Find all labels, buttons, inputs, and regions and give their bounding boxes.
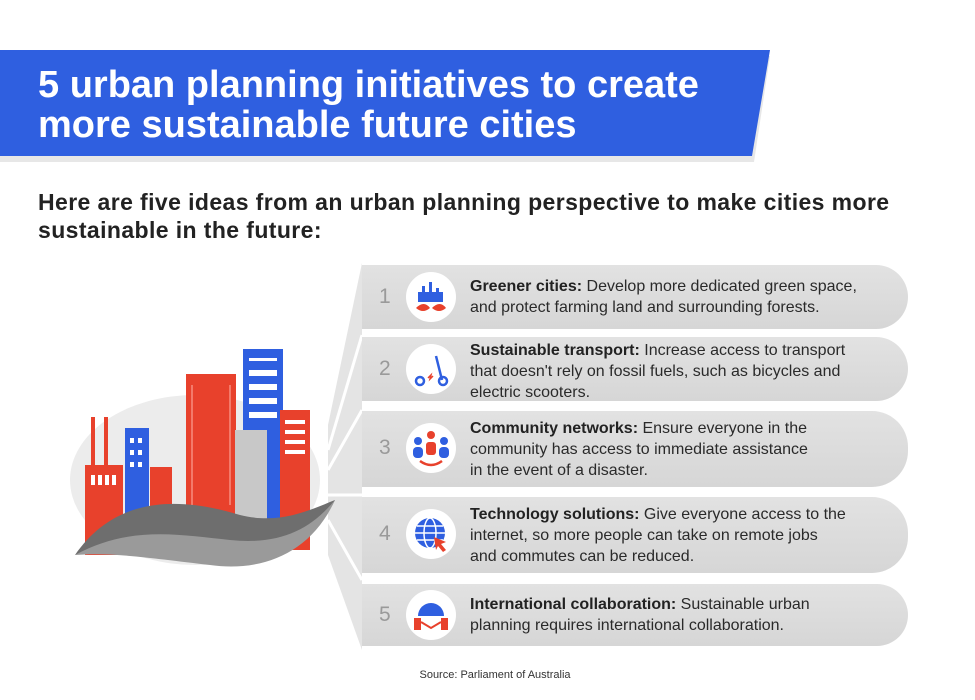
panel 2: electric scooters. xyxy=(470,384,590,401)
title text: more sustainable future cities xyxy=(38,104,576,146)
fan connectors xyxy=(328,264,362,650)
panel 5 xyxy=(362,584,908,646)
panel 4: Technology solutions: Give everyone access to the xyxy=(470,506,846,523)
panel 1: 1 xyxy=(379,285,391,308)
panel 3: Community networks: Ensure everyone in the xyxy=(470,420,807,437)
panel 5: International collaboration: Sustainable urban xyxy=(470,596,810,613)
panel 1 xyxy=(362,265,908,329)
title text: 5 urban planning initiatives to create xyxy=(38,64,699,106)
panel 4: and commutes can be reduced. xyxy=(470,548,694,565)
panel 2: that doesn't rely on fossil fuels, such as bicycles and xyxy=(470,363,840,380)
subtitle xyxy=(38,189,890,243)
panel 4 xyxy=(362,497,908,573)
panel 1: and protect farming land and surrounding forests. xyxy=(470,299,820,316)
panel 5: 5 xyxy=(379,603,391,626)
panel 3: community has access to immediate assistance xyxy=(470,441,808,458)
title text xyxy=(38,64,699,146)
icon: city with leaves xyxy=(406,272,456,322)
panel 3 xyxy=(362,411,908,487)
source note: Source: Parliament of Australia xyxy=(419,669,571,681)
icon: globe with cursor xyxy=(406,509,456,559)
panel 4: 4 xyxy=(379,522,391,545)
icon: scooter xyxy=(406,344,456,394)
panel 4: internet, so more people can take on remote jobs xyxy=(470,527,818,544)
panel 2: 2 xyxy=(379,357,391,380)
title banner xyxy=(0,50,770,162)
icon: community xyxy=(406,423,456,473)
panel 2 xyxy=(362,337,908,401)
icon: globe handshake xyxy=(406,590,456,640)
subtitle: sustainable in the future: xyxy=(38,217,322,243)
panel 1: Greener cities: Develop more dedicated green space, xyxy=(470,278,857,295)
panel 3: in the event of a disaster. xyxy=(470,462,648,479)
panel 3: 3 xyxy=(379,436,391,459)
panel 2: Sustainable transport: Increase access to transport xyxy=(470,342,845,359)
city illustration xyxy=(70,349,335,566)
panel 5: planning requires international collaboration. xyxy=(470,617,784,634)
subtitle: Here are five ideas from an urban planning perspective to make cities more xyxy=(38,189,890,215)
